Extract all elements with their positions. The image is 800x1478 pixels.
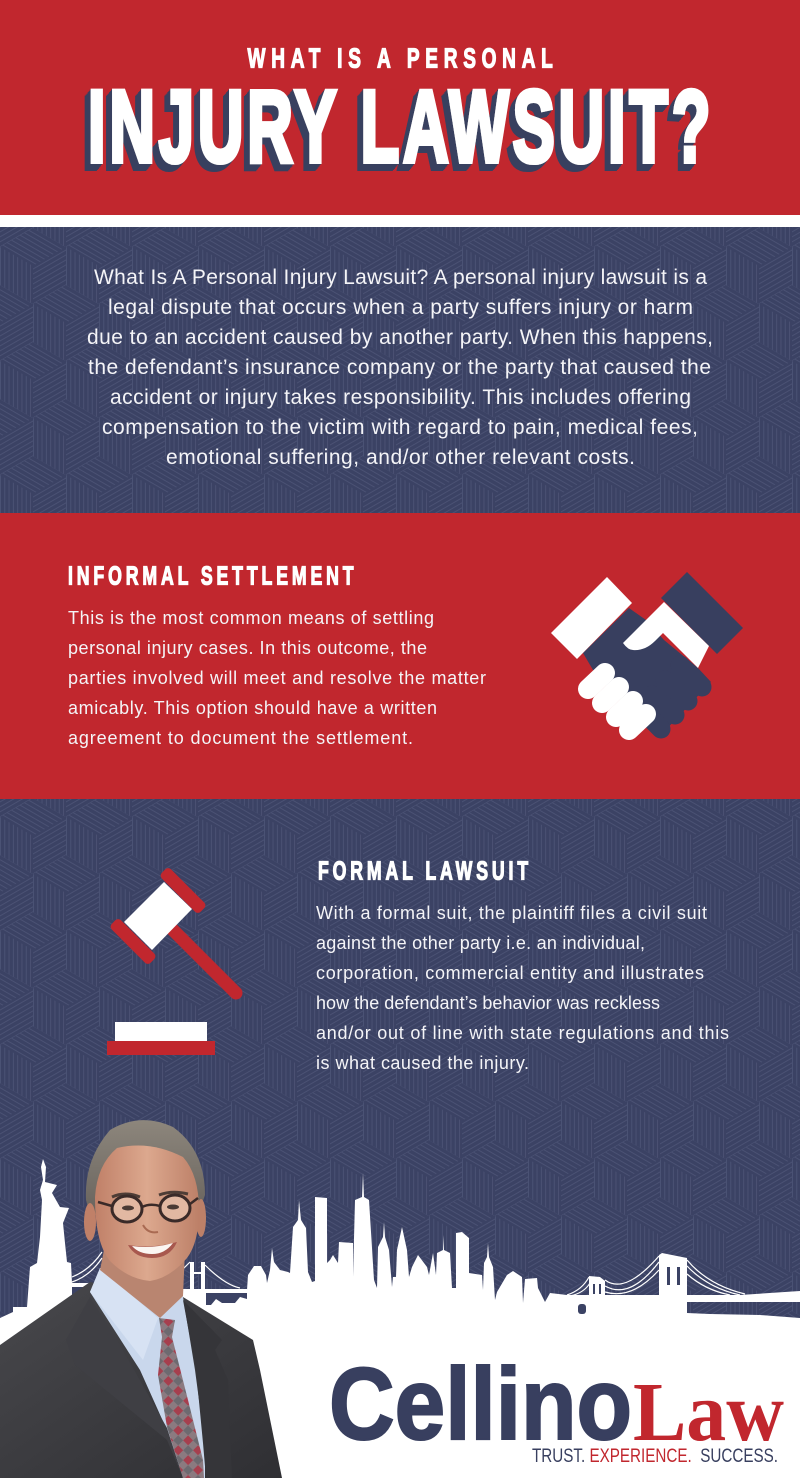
text block: informal settlement: This is the most common means of settling (68, 608, 434, 628)
text block: introduction: the defendant’s insurance company or the party that caused the (88, 356, 711, 379)
neck (100, 1250, 185, 1318)
eyebrows (112, 1192, 188, 1197)
text block: informal settlement: parties involved will meet and resolve the matter (68, 668, 486, 688)
bridge tower details (72, 1267, 680, 1314)
panel: title banner (0, 0, 800, 215)
title (88, 43, 710, 183)
panel: introduction background (0, 227, 800, 513)
wordmark: law: Law (633, 1366, 784, 1459)
glasses (112, 1195, 190, 1222)
photo: attorney portrait (0, 1120, 282, 1478)
text block: informal settlement: amicably. This option should have a written (68, 698, 437, 718)
text block: informal settlement (68, 608, 486, 748)
logo: cellino law (329, 1347, 784, 1467)
text block: formal lawsuit: corporation, commercial entity and illustrates (316, 963, 704, 983)
text block: formal lawsuit: and/or out of line with state regulations and this (316, 1023, 729, 1043)
suit (0, 1282, 282, 1478)
wordmark: cellino: Cellino (329, 1347, 632, 1461)
heading: what is a personal: WHAT IS A PERSONAL (248, 43, 553, 75)
text block: introduction: compensation to the victim with regard to pain, medical fees, (102, 416, 698, 439)
panel: informal settlement background (0, 513, 800, 799)
tagline: TRUST. EXPERIENCE. SUCCESS. (532, 1446, 778, 1467)
text block: formal lawsuit: against the other party i.e. an individual, (316, 933, 645, 953)
face (95, 1145, 199, 1281)
text block: formal lawsuit: With a formal suit, the plaintiff files a civil suit (316, 903, 707, 923)
text block: formal lawsuit: is what caused the injury. (316, 1053, 529, 1073)
tie (158, 1318, 204, 1478)
text block: informal settlement: personal injury cases. In this outcome, the (68, 638, 427, 658)
ears (84, 1203, 96, 1241)
icon: gavel (107, 866, 236, 1055)
shirt (90, 1268, 205, 1478)
heading: informal settlement: INFORMAL SETTLEMENT (68, 561, 354, 590)
mouth (128, 1242, 177, 1258)
text block: introduction: accident or injury takes responsibility. This includes offering (110, 386, 691, 409)
text block: introduction (87, 266, 713, 469)
left and right bridge cables (72, 1252, 745, 1296)
heading: formal lawsuit: FORMAL LAWSUIT (318, 856, 528, 885)
text block: introduction: due to an accident caused by another party. When this happens, (87, 326, 713, 349)
panel: formal lawsuit background (0, 799, 800, 1359)
nose shadow (143, 1225, 158, 1232)
text block: informal settlement: agreement to document the settlement. (68, 728, 413, 748)
collar fold (90, 1268, 158, 1360)
lapels (66, 1297, 183, 1478)
text block: formal lawsuit (316, 903, 729, 1073)
icon: handshake (551, 572, 743, 735)
text block: formal lawsuit: how the defendant’s behavior was reckless (316, 993, 660, 1013)
text block: introduction: emotional suffering, and/or other relevant costs. (166, 446, 635, 469)
panel: white divider (0, 215, 800, 227)
eyes (122, 1206, 134, 1210)
text block: introduction: What Is A Personal Injury Lawsuit? A personal injury lawsuit is a (94, 266, 707, 289)
heading: injury lawsuit: INJURY LAWSUIT? (88, 69, 710, 183)
hair (86, 1120, 205, 1215)
text block: introduction: legal dispute that occurs when a party suffers injury or harm (108, 296, 693, 319)
illustration: new york skyline (0, 1159, 800, 1478)
